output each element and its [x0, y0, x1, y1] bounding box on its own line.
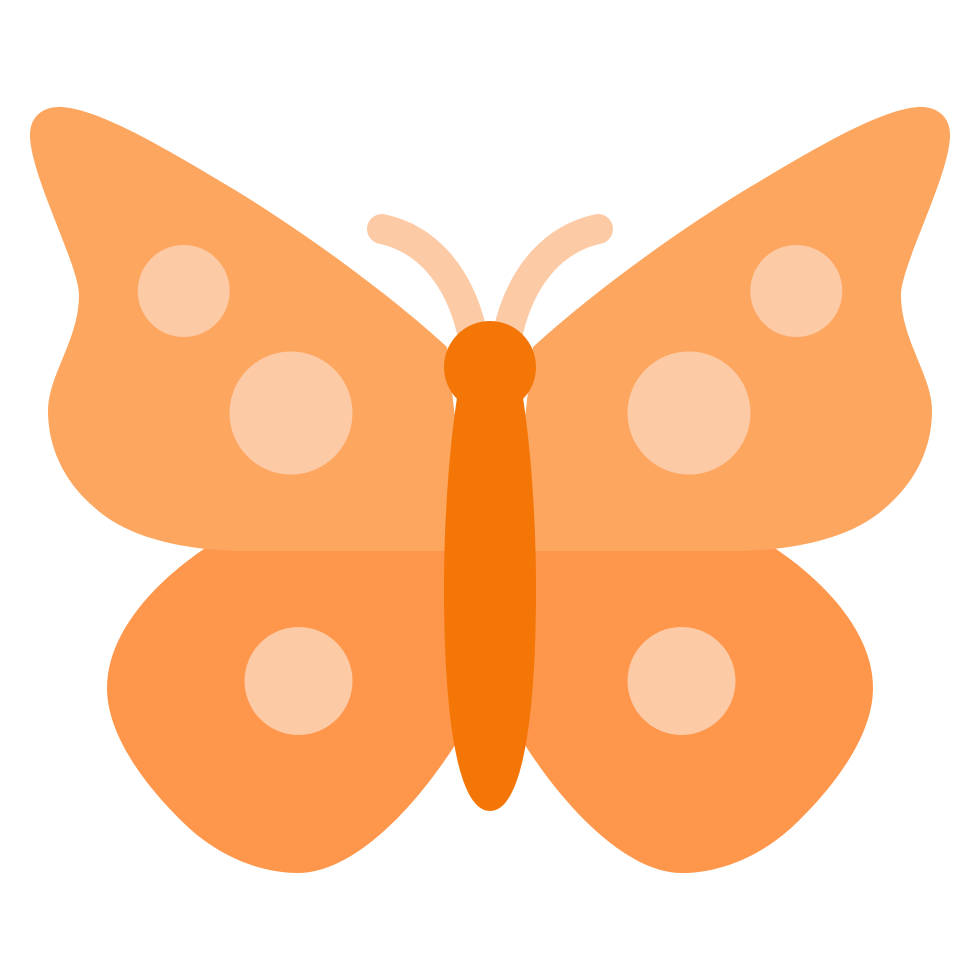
head [444, 321, 536, 413]
spot: left lower wing [244, 627, 352, 735]
left lower wing [107, 547, 470, 873]
butterfly body [444, 321, 536, 811]
right upper wing [510, 107, 950, 551]
spot: right lower wing [628, 627, 736, 735]
left upper wing [30, 107, 470, 551]
spot: upper large left [230, 352, 352, 474]
antennae [382, 229, 598, 332]
spot: upper large right [628, 352, 750, 474]
spot: upper small left [138, 245, 230, 337]
spot: upper small right [750, 245, 842, 337]
abdomen [444, 398, 536, 811]
right lower wing [510, 547, 873, 873]
